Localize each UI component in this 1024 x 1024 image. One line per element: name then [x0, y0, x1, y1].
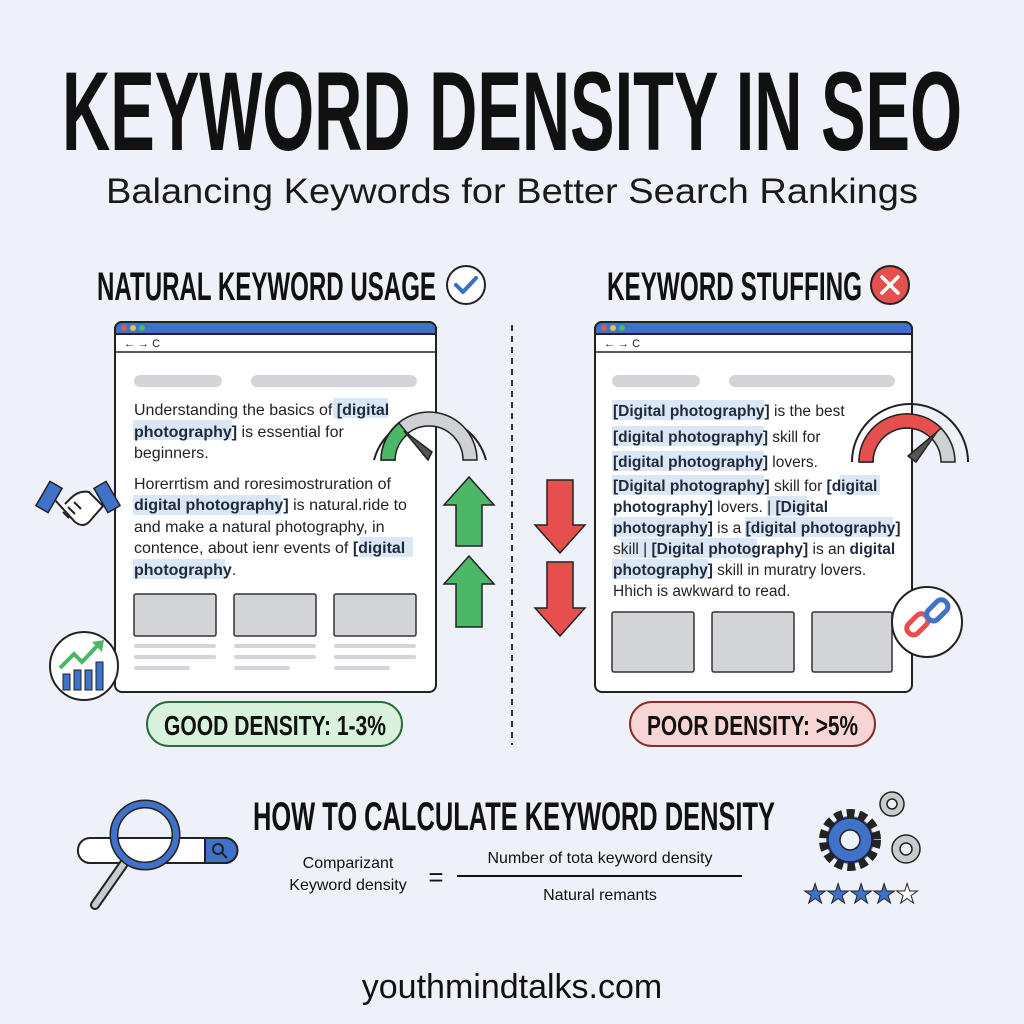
text block: stuffed paragraph: skill | [Digital photography] is an digital [613, 541, 895, 558]
pill: poor density [630, 702, 875, 746]
formula: = [428, 862, 444, 892]
text block: natural paragraph: and make a natural photography, in [134, 519, 385, 536]
formula: Number of tota keyword density [488, 850, 712, 867]
footer url: youthmindtalks.com [362, 968, 662, 1006]
icon: rating stars: ★ [826, 879, 850, 909]
pill: good density [147, 702, 402, 746]
icon: chart circle [50, 632, 118, 700]
icon: rating stars: ★ [849, 879, 873, 909]
icon: gears [826, 792, 920, 864]
text block: stuffed paragraph: Hhich is awkward to read. [613, 583, 790, 600]
text block: natural paragraph [133, 398, 413, 579]
text block: stuffed paragraph: photography] lovers. | [Digital [613, 499, 828, 516]
text block: stuffed paragraph: [digital photography] skill for [613, 429, 821, 446]
icon: green gauge [374, 412, 486, 460]
text block: stuffed paragraph [612, 400, 901, 600]
formula [289, 850, 742, 904]
arrow: red down 1 [535, 480, 585, 553]
icon: check [447, 266, 485, 304]
icon: search magnifier [78, 804, 238, 905]
panel: natural browser: ← → C [124, 338, 160, 350]
panel: stuffing browser: ← → C [604, 338, 640, 350]
heading: natural keyword usage: NATURAL KEYWORD USAGE [97, 265, 436, 309]
formula: Comparizant [303, 855, 394, 872]
text block: natural paragraph: photography. [134, 562, 236, 579]
icon: handshake [36, 481, 120, 525]
text block: stuffed paragraph: photography] is a [digital photography] [613, 520, 901, 537]
text block: natural paragraph: beginners. [134, 445, 209, 462]
formula: Keyword density [289, 877, 407, 894]
text block: stuffed paragraph: [digital photography] lovers. [613, 454, 818, 471]
text block: natural paragraph: photography] is essential for [134, 424, 344, 441]
text block: natural paragraph: contence, about ienr events of [digital [134, 540, 405, 557]
icon: cross [871, 266, 909, 304]
panel: natural browser [115, 322, 436, 692]
text block: stuffed paragraph: [Digital photography] is the best [613, 403, 845, 420]
formula: Natural remants [543, 887, 657, 904]
subtitle: Balancing Keywords for Better Search Rankings [106, 172, 918, 211]
arrow: green up 2 [444, 556, 494, 627]
text block: stuffed paragraph: photography] skill in muratry lovers. [613, 562, 866, 579]
pill: good density: GOOD DENSITY: 1-3% [164, 710, 386, 741]
text block: stuffed paragraph: [Digital photography] skill for [digital [613, 478, 877, 495]
icon: broken chain [892, 587, 962, 657]
icon: red gauge [852, 404, 968, 462]
arrow: red down 2 [535, 562, 585, 636]
icon: rating stars [803, 879, 919, 909]
icon: rating stars: ★ [895, 879, 919, 909]
icon: rating stars: ★ [872, 879, 896, 909]
pill: poor density: POOR DENSITY: >5% [647, 710, 858, 741]
arrow: green up 1 [444, 477, 494, 546]
text block: natural paragraph: digital photography] is natural.ride to [134, 497, 407, 514]
text block: natural paragraph: Understanding the basics of [digital [134, 402, 389, 419]
text block: natural paragraph: Horerrtism and roresimostruration of [134, 476, 392, 493]
icon: rating stars: ★ [803, 879, 827, 909]
heading: keyword stuffing: KEYWORD STUFFING [607, 265, 862, 309]
panel: stuffing browser [595, 322, 912, 692]
